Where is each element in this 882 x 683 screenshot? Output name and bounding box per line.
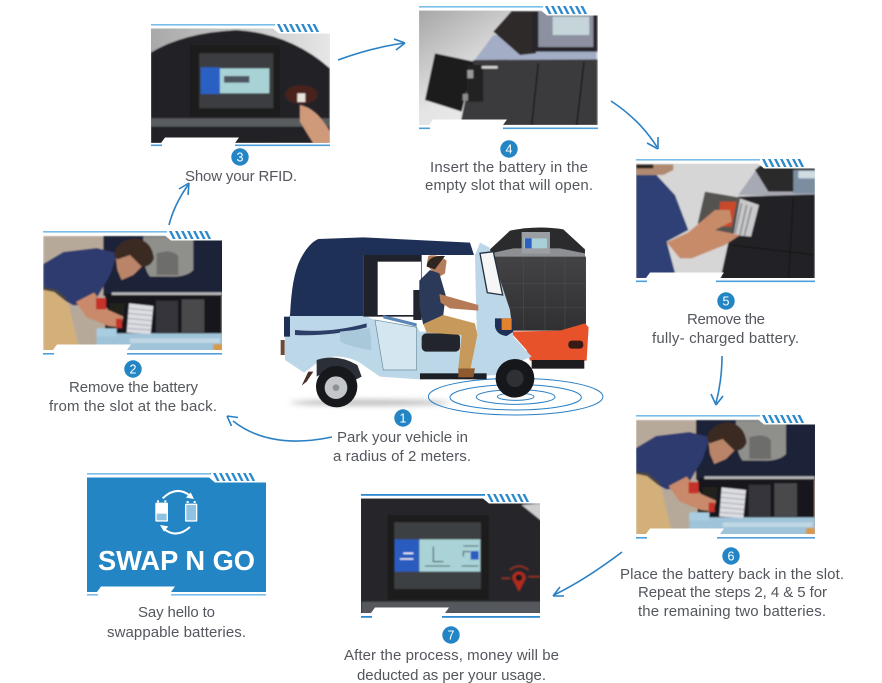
panel: step 2 remove battery [43, 231, 223, 355]
seat and driver [383, 255, 478, 377]
step 2 label: Remove the battery [69, 379, 198, 396]
icon: battery swap [155, 491, 197, 534]
step 3 label [185, 148, 297, 185]
step 6 label: the remaining two batteries. [638, 603, 826, 620]
badge 7 [442, 626, 460, 644]
arrow: 6 to 7 [553, 552, 622, 596]
badge 5: 5 [723, 294, 730, 308]
frame and hatch [87, 473, 266, 596]
logo text: SWAP N GO [98, 545, 255, 576]
step 5 label [652, 292, 799, 347]
step 6 label: Repeat the steps 2, 4 & 5 for [638, 584, 827, 601]
rings [428, 378, 603, 415]
frame and hatch [636, 415, 815, 539]
caption: Say hello: Say hello to [138, 604, 215, 621]
badge 2 [124, 360, 142, 378]
arrow: 1 to 2 [227, 416, 332, 441]
badge 5 [717, 292, 735, 310]
step 7 label [344, 626, 559, 683]
frame and hatch [361, 494, 540, 618]
caption: Say hello [107, 604, 246, 641]
wheels [302, 359, 534, 407]
step 4 label: empty slot that will open. [425, 177, 593, 194]
blue card [87, 473, 266, 594]
caption: Say hello: swappable batteries. [107, 624, 246, 641]
step 1 label: Park your vehicle in [337, 429, 468, 446]
ground shadow [290, 400, 450, 406]
badge 6 [722, 547, 740, 565]
badge 2: 2 [130, 362, 137, 376]
photo: open slot [418, 10, 598, 127]
arrow: 2 to 3 [169, 183, 189, 225]
panel: step 7 payment screen [360, 494, 542, 618]
body [285, 243, 532, 379]
step 2 label [49, 360, 217, 415]
step 4 label: Insert the battery in the [430, 159, 588, 176]
frame and hatch [151, 24, 330, 146]
badge 3: 3 [237, 150, 244, 164]
illustration: electric rickshaw at swap station [281, 227, 603, 415]
body panels [281, 317, 513, 380]
panel: step 6 place battery back [636, 415, 816, 539]
panel: Swap N Go logo [87, 473, 266, 596]
arrow: 5 to 6 [711, 356, 723, 405]
panel: step 5 remove charged battery [635, 159, 816, 282]
photo: man removing battery [43, 236, 223, 353]
badge 1: 1 [400, 412, 407, 426]
badge 6: 6 [728, 550, 735, 564]
arrow: 4 to 5 [611, 101, 658, 149]
step 5 label: fully- charged battery. [652, 330, 799, 347]
step 5 label: Remove the [687, 311, 765, 328]
step 4 label [425, 140, 593, 194]
photo: man placing battery [636, 420, 816, 537]
photo: man holding battery [635, 163, 816, 281]
step 3 label: Show your RFID. [185, 168, 297, 185]
step 1 label [333, 409, 471, 465]
step 6 label: Place the battery back in the slot. [620, 566, 844, 583]
step 2 label: from the slot at the back. [49, 398, 217, 415]
badge 4 [500, 140, 518, 158]
panel: step 4 insert battery [418, 6, 598, 129]
canopy [290, 237, 474, 316]
panel: step 3 show RFID [150, 24, 331, 146]
frame and hatch [43, 231, 222, 355]
arrow: 3 to 4 [338, 39, 405, 60]
photo: RFID kiosk [150, 27, 331, 144]
frame and hatch [419, 6, 598, 129]
step 1 label: a radius of 2 meters. [333, 448, 471, 465]
cabin openings [363, 252, 503, 330]
frame and hatch [636, 159, 815, 282]
badge 4: 4 [506, 142, 513, 156]
photo: kiosk payment screen [360, 498, 542, 615]
kiosk [490, 227, 589, 369]
badge 7: 7 [448, 628, 455, 642]
step 6 label [620, 547, 844, 620]
step 7 label: After the process, money will be [344, 647, 559, 664]
